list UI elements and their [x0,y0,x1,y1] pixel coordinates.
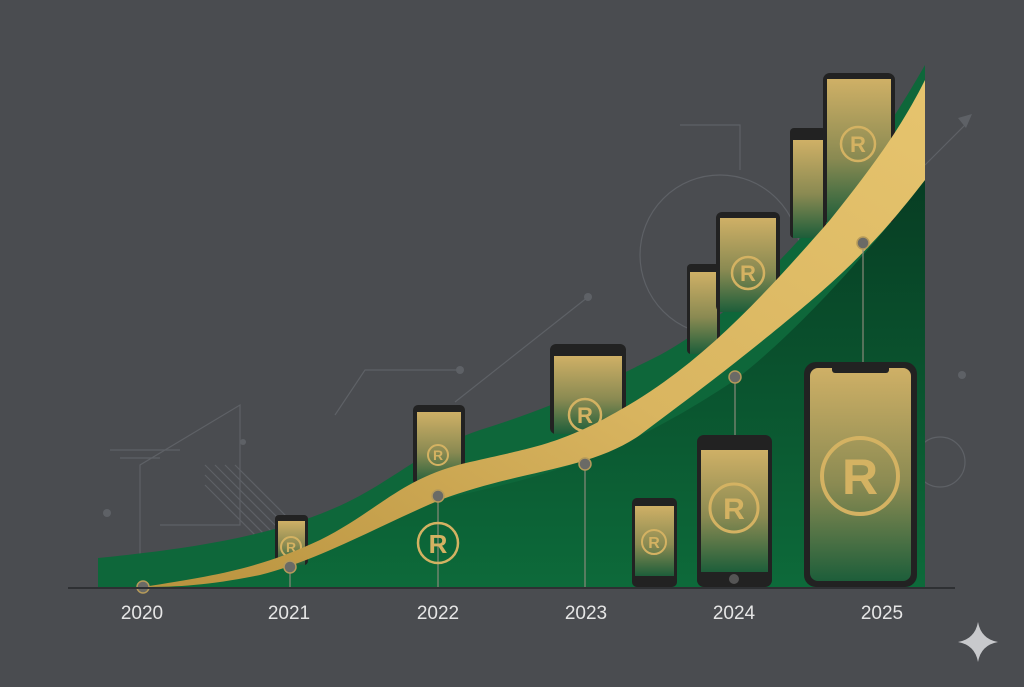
year labels: 2025 [861,603,903,624]
phones behind band: R [577,403,593,428]
gold growth band [143,80,925,587]
icon: sparkle [958,622,998,662]
front phones: R [648,535,660,552]
phones behind band: R [740,261,756,286]
year labels: 2024 [713,603,756,624]
year labels: 2023 [565,603,607,624]
icon: 2022 registered mark: R [429,529,448,559]
front phones [632,362,917,587]
phones behind band [275,73,895,565]
year labels [121,603,903,624]
phones behind band: R [850,132,866,157]
year labels: 2022 [417,603,459,624]
front phones: R [842,449,878,505]
chart: green area [98,65,925,587]
icon: 2022 registered mark [418,523,458,563]
front phones: R [723,493,745,526]
year labels: 2020 [121,603,163,624]
year labels: 2021 [268,603,310,624]
background decorations [110,125,965,560]
baseline axis [68,587,955,589]
data points with drop lines [290,243,863,587]
